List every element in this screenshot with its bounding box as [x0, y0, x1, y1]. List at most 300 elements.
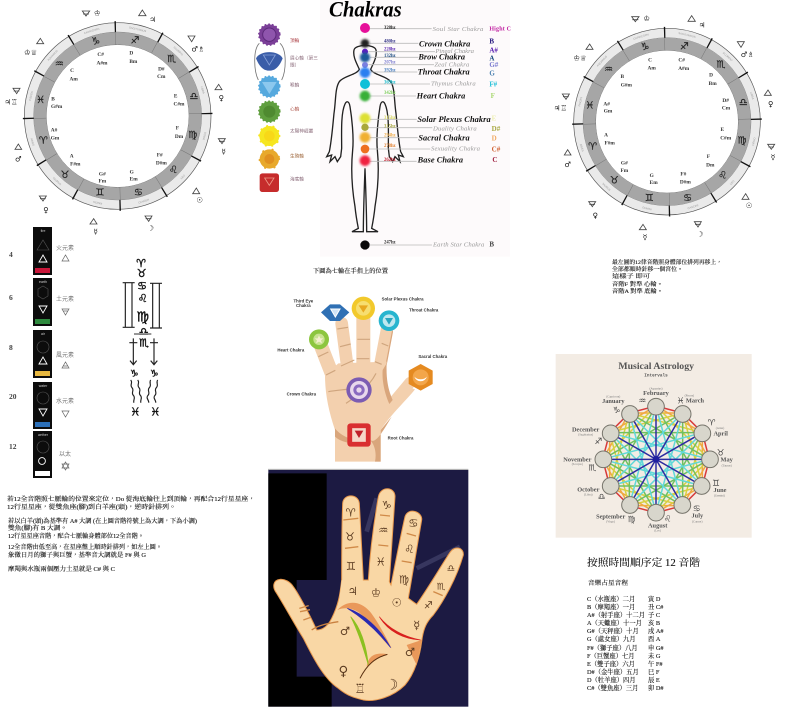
- chakra names: Duality Chakra: [432, 125, 477, 132]
- chakra dots: [360, 23, 370, 250]
- chakra names in Chinese: 頂輪: [290, 37, 300, 44]
- element names and triangles: 火元素: [56, 244, 74, 252]
- zodiac wheel: left, natural scale: TAURUS: [52, 176, 62, 186]
- frequency labels: 480hz: [384, 40, 396, 45]
- musical notes: C#: [492, 145, 501, 153]
- chord labels: right wheel: F: [707, 154, 710, 160]
- zodiac wheel: right, shifted one house: GEMINI: [642, 205, 652, 211]
- zodiac and planet glyphs: ♐︎: [424, 601, 433, 612]
- musical notes: G#: [489, 61, 499, 69]
- chord labels: left wheel: B: [51, 96, 55, 102]
- zodiac wheel: right, shifted one house: ♋︎: [683, 193, 692, 204]
- chord labels: left wheel: A#m: [97, 60, 108, 66]
- zodiac and planet glyphs: ♂︎: [340, 624, 350, 638]
- table: note zodiac month mapping: D（牡羊座）四月: [587, 675, 636, 684]
- table: note zodiac month mapping: G#（天秤座）十月: [587, 626, 639, 635]
- connector lines: [368, 29, 435, 245]
- month labels: April: [713, 430, 728, 437]
- chakra labels on hand: Chakra: [296, 303, 311, 308]
- element counts: 12: [9, 442, 17, 451]
- chakra labels on hand: Third Eye: [293, 299, 314, 304]
- panel: platonic element cards: [9, 227, 74, 478]
- chakra labels on hand: Throat Chakra: [409, 307, 439, 312]
- table: note zodiac month mapping: 辰 E: [648, 676, 660, 684]
- text block: twelve tones explanation: 12全音階由低至高，在星座盤上順時針排列，如左上圖。: [8, 543, 162, 551]
- zodiac wheel: right, shifted one house: CAPRICORN: [633, 32, 649, 41]
- chord labels: left wheel: A#: [51, 128, 58, 134]
- caption: chakras on the hand: 下圖為七輪在手指上的位置: [313, 267, 388, 275]
- chakra names in Chinese: [290, 37, 318, 183]
- zodiac wheel: right, shifted one house: ♔︎: [643, 14, 650, 23]
- zodiac wheel: left, natural scale: ♐︎: [131, 36, 139, 47]
- chakra names: Pineal Chakra: [434, 48, 475, 55]
- element counts: 8: [9, 343, 13, 352]
- card: aether: aether: [38, 433, 49, 437]
- card: water: [33, 382, 52, 429]
- interval star: [603, 406, 709, 513]
- element counts: [9, 250, 17, 451]
- zodiac wheel: right, shifted one house: ♓︎: [586, 101, 594, 112]
- zodiac wheel: left, natural scale: ♃︎: [149, 15, 156, 24]
- icon: solar plexus lotus: [259, 126, 279, 146]
- chord labels: right wheel: F#m: [604, 140, 615, 146]
- chakra labels on hand: Heart Chakra: [277, 347, 305, 352]
- zodiac signs around chart: ♋︎: [693, 505, 701, 515]
- zodiac signs around chart: ♈︎: [708, 419, 716, 429]
- chord labels: right wheel: F#: [680, 171, 687, 177]
- frequency labels: 328hz: [384, 26, 396, 31]
- chakra names: Heart Chakra: [416, 91, 465, 100]
- zodiac wheel: left, natural scale: ♎︎: [190, 92, 199, 103]
- zodiac wheel: left, natural scale: ARIES: [29, 138, 36, 147]
- zodiac wheel: right, shifted one house: TAURUS: [601, 182, 612, 192]
- zodiac wheel: right, shifted one house: ♊︎: [645, 193, 654, 204]
- chakra names in Chinese: 太陽神經叢: [290, 128, 314, 135]
- month labels: November: [563, 456, 592, 463]
- zodiac wheel: left, natural scale: LEO: [179, 173, 186, 180]
- chord labels: left wheel: C: [70, 68, 74, 74]
- frequency labels: 369hz: [384, 80, 396, 85]
- musical notes: E: [492, 115, 497, 123]
- zodiac wheel: right, shifted one house: ♀︎: [593, 211, 598, 220]
- zodiac and planet glyphs: ☉︎: [392, 596, 402, 610]
- element names and triangles: 土元素: [56, 295, 74, 303]
- card: earth: [33, 278, 52, 326]
- table: note zodiac month mapping: 酉 A: [648, 635, 661, 643]
- chord labels: right wheel: A#m: [678, 66, 690, 72]
- icon: sacral chakra: [409, 364, 433, 391]
- card: aether: [33, 431, 52, 478]
- chord labels: right wheel: G#: [621, 161, 628, 167]
- zodiac and planet glyphs: ♏︎: [437, 581, 446, 592]
- card: fire: [33, 227, 52, 275]
- chakra names: Sexuality Chakra: [431, 145, 481, 152]
- musical notes: F#: [489, 80, 498, 88]
- chord labels: right wheel: Dm: [706, 162, 715, 168]
- zodiac wheel: right, shifted one house: CANCER: [687, 203, 699, 210]
- chord labels: right wheel: A#: [603, 101, 610, 107]
- month labels: (Capricorn): [606, 394, 620, 398]
- panel: zodiac body column: ♋︎: [137, 279, 147, 292]
- panel: zodiac body column: ♑︎: [130, 368, 139, 379]
- icon: third eye chakra: [321, 304, 349, 321]
- chord labels: left wheel: D#: [158, 67, 165, 73]
- zodiac and planet glyphs: ☿︎: [413, 618, 420, 632]
- chord labels: right wheel: Fm: [620, 168, 629, 174]
- month labels: June: [713, 487, 727, 494]
- zodiac wheel: left, natural scale: ♃︎♖︎: [4, 98, 18, 107]
- frequency labels: 315hz: [384, 124, 396, 129]
- zodiac wheel: left, natural scale: CANCER: [138, 198, 150, 205]
- chakra names: [416, 26, 491, 248]
- text block: right wheel note: 音階A 對準 底輪。: [612, 287, 663, 295]
- zodiac wheel: right, shifted one house: VIRGO: [751, 137, 757, 146]
- frequency labels: [384, 26, 396, 245]
- chord labels: left wheel: Dm: [175, 134, 184, 140]
- chord labels: right wheel: Gm: [604, 108, 613, 114]
- panel: zodiac body column: [123, 257, 162, 419]
- table: note zodiac month mapping: D#（金牛座）五月: [587, 667, 639, 676]
- text block: right wheel note: 音階F 對準 心輪。: [612, 280, 663, 288]
- chord labels: left wheel: G: [130, 169, 134, 175]
- zodiac wheel: left, natural scale: ♓︎: [36, 95, 45, 106]
- table: note zodiac month mapping: F#（獅子座）八月: [587, 643, 638, 652]
- month labels: (Cancer): [692, 520, 703, 524]
- zodiac wheel: right, shifted one house: ♒︎: [604, 65, 613, 76]
- chord labels: left wheel: F#m: [70, 162, 81, 168]
- chakra names: Thymus Chakra: [431, 81, 476, 88]
- zodiac wheel: right, shifted one house: ☿︎: [643, 233, 647, 242]
- month labels: December: [572, 426, 600, 433]
- zodiac wheel: right, shifted one house: ♉︎: [610, 176, 619, 187]
- zodiac and planet glyphs: ♂︎: [405, 645, 415, 659]
- palm creases and shading: [299, 515, 443, 667]
- chakra names in Chinese: 眉心輪（第三: [290, 55, 318, 62]
- table: note zodiac month mapping: A#（射手座）十二月: [587, 610, 645, 619]
- zodiac wheel: right, shifted one house: ☉︎: [746, 201, 752, 210]
- chord labels: left wheel: F#: [157, 153, 163, 159]
- text block: twelve tones explanation: 若以白羊(頭)為基準有 A# 大調 (在上圖音階符號上為大調，下為小調): [8, 517, 197, 525]
- text block: right wheel note: 這樣子 即可: [612, 272, 651, 280]
- month labels: (Virgo): [606, 520, 615, 524]
- chakra names in Chinese: 眼）: [290, 63, 299, 69]
- chord labels: left wheel: G#: [99, 171, 106, 177]
- zodiac wheel: left, natural scale: CAPRICORN: [83, 27, 100, 35]
- text block: twelve tones explanation: 摩羯與水瓶兩個壓力土星就是 C# 與 C: [8, 565, 115, 573]
- musical notes: B: [489, 240, 494, 248]
- zodiac wheel: left, natural scale: ♀︎: [43, 205, 49, 214]
- zodiac wheel: left, natural scale: ♂︎: [15, 154, 22, 163]
- chord labels: right wheel: D: [709, 73, 713, 79]
- chakra names: Base Chakra: [417, 156, 463, 165]
- zodiac signs around chart: ♏︎: [588, 463, 596, 473]
- chord labels: right wheel: E: [721, 127, 725, 133]
- zodiac wheel: left, natural scale: ♔︎♕︎: [24, 48, 37, 57]
- planet spheres: [595, 398, 718, 521]
- zodiac signs around chart: ♓︎: [677, 397, 685, 407]
- month labels: (Aries): [716, 426, 724, 430]
- zodiac wheel: right, shifted one house: ♃︎: [699, 21, 705, 30]
- chart title: Musical Astrology: [618, 362, 694, 372]
- zodiac wheel: right, shifted one house: ♈︎: [588, 141, 597, 152]
- panel: zodiac body column: ♑︎: [150, 368, 159, 379]
- blue heart line: [347, 608, 391, 648]
- chord labels: left wheel: D#m: [156, 161, 167, 167]
- zodiac wheel: left, natural scale: ☽︎: [147, 224, 154, 233]
- frequency labels: 294hz: [384, 134, 396, 139]
- zodiac and planet glyphs: [338, 498, 455, 696]
- frequency labels: 207hz: [384, 61, 396, 66]
- frequency labels: 342hz: [384, 91, 396, 96]
- chord labels: right wheel: G: [650, 173, 654, 179]
- zodiac signs around chart: ♒︎: [638, 397, 646, 407]
- zodiac wheel: right, shifted one house: ♔︎♕︎: [573, 54, 587, 63]
- month labels: (Sagittarius): [578, 432, 593, 436]
- panel: hand with seven chakras: [268, 296, 468, 469]
- musical notes: C: [492, 156, 497, 164]
- chord labels: right wheel: G#m: [621, 82, 633, 88]
- chord labels: left wheel: Em: [130, 176, 138, 182]
- table: note zodiac month mapping: F（巨蟹座）七月: [587, 651, 635, 660]
- frequency labels: 315hz: [384, 116, 396, 121]
- zodiac signs around chart: ♍︎: [628, 515, 636, 525]
- zodiac and planet glyphs: ☽︎: [385, 677, 398, 694]
- table: note zodiac month mapping: 卯 D#: [648, 683, 664, 692]
- zodiac wheel: left, natural scale: [4, 8, 226, 236]
- table: note zodiac month mapping: 巳 F: [648, 668, 660, 676]
- zodiac wheel: left, natural scale: ♒︎: [55, 59, 64, 70]
- zodiac and planet glyphs: ♓︎: [376, 555, 386, 569]
- chakra labels on hand: Solar Plexus Chakra: [382, 296, 424, 301]
- zodiac wheel: right, shifted one house: ♃︎♖︎: [554, 103, 567, 112]
- chord labels: right wheel: B: [621, 74, 625, 80]
- frequency labels: 247hz: [384, 240, 396, 245]
- icon: root lotus: [260, 173, 279, 192]
- table: note zodiac month mapping: B（摩羯座）一月: [587, 602, 635, 611]
- zodiac signs around chart: ♐︎: [594, 437, 602, 447]
- zodiac signs around chart: ♑︎: [613, 406, 621, 416]
- chord labels: left wheel: G#m: [51, 104, 63, 110]
- musical notes: D#: [492, 125, 501, 133]
- zodiac and planet glyphs: ♌︎: [404, 542, 414, 556]
- chord labels: right wheel: C#m: [720, 135, 732, 141]
- card: earth: earth: [39, 280, 47, 284]
- frequency labels: 278hz: [384, 144, 396, 149]
- chord labels: left wheel: Cm: [157, 74, 166, 80]
- frequency labels: 262hz: [384, 158, 396, 163]
- chakra names in Chinese: 心輪: [290, 106, 300, 113]
- chakra names: Solar Plexus Chakra: [417, 115, 491, 124]
- chakra labels on hand: Sacral Chakra: [418, 354, 448, 359]
- month labels: (Gemini): [714, 493, 725, 497]
- text block: twelve tones explanation: 若12全音階照七脈輪的位置來定位，Do 從海底輪往上到頂輪，再配合12行星星座，: [7, 495, 255, 503]
- icon: heart lotus: [259, 101, 280, 122]
- musical notes: G: [489, 69, 495, 77]
- zodiac wheel: left, natural scale: SCORPIO: [173, 45, 184, 57]
- table: note zodiac month mapping: 戌 A#: [648, 626, 664, 635]
- icon: crown lotus: [259, 24, 280, 45]
- chart subtitle: Intervals: [644, 374, 668, 379]
- zodiac wheel: right, shifted one house: ♌︎: [718, 171, 727, 182]
- chord labels: right wheel: A: [604, 132, 608, 138]
- chakra names: Earth Star Chakra: [432, 241, 485, 248]
- chord labels: right wheel: C: [648, 57, 652, 63]
- chakra names: Soul Star Chakra: [433, 26, 484, 33]
- panel: Musical Astrology chart: [556, 354, 752, 538]
- chord labels: left wheel: E: [174, 94, 178, 100]
- panel: chakra lotus symbols: [255, 24, 318, 192]
- card: fire: fire: [41, 229, 45, 233]
- element names and triangles: 水元素: [56, 397, 74, 405]
- chakra names: Brow Chakra: [417, 53, 465, 62]
- subheading: musical astrology intervals: 音樂占星音程: [588, 579, 628, 587]
- zodiac wheel: right, shifted one house: ☿︎: [771, 153, 775, 162]
- text block: twelve tones explanation: 12行星星座音階，配合七脈輪身體部位12全音階。: [8, 532, 144, 540]
- panel: zodiac body column: ♏︎: [139, 337, 149, 350]
- zodiac and planet glyphs: ♒︎: [378, 523, 388, 537]
- chord labels: left wheel: [51, 51, 185, 184]
- musical notes: B: [489, 38, 494, 46]
- icon: throat lotus: [259, 76, 280, 97]
- zodiac wheel: right, shifted one house: ♂︎: [564, 160, 571, 169]
- chord labels: right wheel: Bm: [709, 81, 717, 87]
- zodiac signs around chart: ♌︎: [664, 514, 672, 524]
- chakra names: Zeal Chakra: [434, 62, 470, 69]
- month labels: (Pisces): [685, 394, 694, 398]
- text block: right wheel note: 全部都順時針移一個宮位。: [612, 265, 683, 273]
- month labels: July: [692, 513, 704, 520]
- text block: right wheel note: [612, 258, 722, 295]
- table: note zodiac month mapping: 子 C: [648, 611, 660, 619]
- chord labels: left wheel: Am: [70, 77, 78, 83]
- text block: twelve tones explanation: 12行星星座，從雙魚座(腳)到白羊座(頭)，逆時針排列。: [7, 503, 176, 511]
- month labels: (Libra): [584, 493, 593, 497]
- zodiac wheel: right, shifted one house: AQUARIUS: [596, 54, 608, 67]
- table: note zodiac month mapping: 亥 B: [648, 618, 660, 627]
- zodiac wheel: left, natural scale: ♉︎: [61, 170, 70, 181]
- zodiac wheel: left, natural scale: ♑︎: [91, 36, 100, 47]
- zodiac wheel: left, natural scale: ♌︎: [169, 165, 178, 176]
- zodiac wheel: left, natural scale: AQUARIUS: [46, 49, 59, 62]
- zodiac wheel: right, shifted one house: ♍︎: [738, 136, 747, 147]
- zodiac and planet glyphs: ♊︎: [346, 559, 356, 573]
- zodiac wheel: right, shifted one house: ♂︎♗︎: [741, 50, 754, 59]
- zodiac wheel: left, natural scale: ♀︎: [219, 94, 224, 103]
- table: note zodiac month mapping: 丑 C#: [648, 603, 664, 611]
- month labels: (Taurus): [722, 464, 732, 468]
- zodiac and planet glyphs: ♎︎: [447, 563, 455, 574]
- icon: root chakra: [347, 423, 371, 447]
- chord labels: right wheel: [603, 57, 732, 186]
- month labels: August: [648, 522, 668, 529]
- zodiac wheel: left, natural scale: GEMINI: [93, 200, 103, 206]
- chord labels: right wheel: Am: [648, 66, 656, 72]
- text block: twelve tones explanation: 雙魚(腳)有 B 大調。: [8, 524, 67, 532]
- zodiac wheel: right, shifted one house: ♑︎: [641, 42, 649, 53]
- zodiac wheel: left, natural scale: ♏︎: [167, 54, 176, 65]
- table: note zodiac month mapping: C（水瓶座）二月: [587, 594, 635, 603]
- chord labels: left wheel: C#m: [174, 102, 185, 108]
- frequency labels: 392hz: [384, 68, 396, 73]
- hand shape: [318, 318, 415, 462]
- zodiac wheel: right, shifted one house: SCORPIO: [722, 51, 734, 62]
- zodiac and planet glyphs: ♖︎: [354, 681, 366, 696]
- musical notes: [489, 27, 511, 248]
- panel: zodiac body column: ♓︎: [150, 406, 160, 419]
- table: note zodiac month mapping: [587, 594, 664, 692]
- icon: third eye lotus: [256, 52, 283, 71]
- zodiac wheel: right, shifted one house: PISCES: [577, 96, 583, 107]
- hand shape: [274, 489, 463, 701]
- heading: twelve tone order: 按照時間順序定 12 音階: [587, 556, 700, 569]
- chord labels: left wheel: Gm: [51, 135, 60, 141]
- table: note zodiac month mapping: 未 G: [648, 651, 661, 660]
- zodiac wheel: right, shifted one house: SAGITTARIUS: [678, 31, 696, 39]
- panel: zodiac body column: ♉︎: [137, 267, 147, 280]
- icon: throat chakra: [379, 310, 399, 331]
- element counts: 4: [9, 250, 13, 259]
- zodiac wheel: right, shifted one house: ♀︎: [768, 99, 773, 108]
- zodiac wheel: left, natural scale: ☉︎: [196, 195, 203, 204]
- zodiac and planet glyphs: ♀︎: [338, 664, 348, 679]
- table: note zodiac month mapping: A（天蠍座）十一月: [587, 618, 642, 627]
- zodiac wheel: right, shifted one house: ARIES: [579, 143, 585, 152]
- month labels: January: [602, 398, 625, 405]
- table: note zodiac month mapping: C#（雙魚座）三月: [587, 683, 638, 692]
- icon: crown chakra: [346, 377, 372, 403]
- month labels: September: [596, 514, 625, 521]
- chakra names in Chinese: 生殖輪: [290, 153, 304, 160]
- zodiac and planet glyphs: ♑︎: [382, 498, 392, 512]
- panel: zodiac body column: ♈︎: [136, 257, 146, 270]
- icon: heart chakra: [309, 329, 329, 349]
- chakra labels on hand: Crown Chakra: [287, 392, 317, 397]
- zodiac and planet glyphs: ♈︎: [346, 505, 357, 519]
- table: note zodiac month mapping: 申 G#: [648, 643, 664, 652]
- chord labels: right wheel: D#: [722, 98, 729, 104]
- element counts: 6: [9, 293, 13, 302]
- chord labels: right wheel: Cm: [722, 105, 731, 111]
- card: water: water: [39, 384, 48, 388]
- element counts: 20: [9, 392, 17, 401]
- chakra labels on hand: Root Chakra: [388, 436, 414, 441]
- chakra names: Throat Chakra: [418, 68, 470, 77]
- panel: palmistry hand with zodiac: [268, 470, 468, 707]
- zodiac and planet glyphs: ♉︎: [345, 530, 355, 544]
- zodiac wheel: left, natural scale: ♋︎: [134, 187, 143, 198]
- chakra names: Crown Chakra: [419, 39, 470, 48]
- icon: sacral lotus: [260, 149, 279, 169]
- month labels: February: [643, 390, 670, 397]
- card: air: [33, 330, 52, 378]
- table: note zodiac month mapping: 午 F#: [648, 659, 663, 668]
- month labels: May: [721, 457, 734, 464]
- zodiac and planet glyphs: ♃︎: [348, 584, 358, 598]
- chord labels: right wheel: Em: [650, 180, 658, 186]
- zodiac wheel: right, shifted one house: [554, 14, 775, 242]
- zodiac wheel: right, shifted one house: LIBRA: [749, 91, 755, 100]
- chord labels: right wheel: C#: [678, 57, 685, 63]
- panel: zodiac body column: ♌︎: [138, 292, 148, 305]
- musical notes: A: [489, 54, 494, 62]
- chord labels: left wheel: Bm: [129, 59, 138, 65]
- month labels: October: [577, 486, 600, 493]
- zodiac signs around chart: ♉︎: [717, 448, 725, 458]
- body outline: [327, 45, 403, 232]
- musical notes: D: [492, 134, 497, 142]
- month labels: March: [686, 398, 705, 405]
- text block: twelve tones explanation: [7, 495, 255, 573]
